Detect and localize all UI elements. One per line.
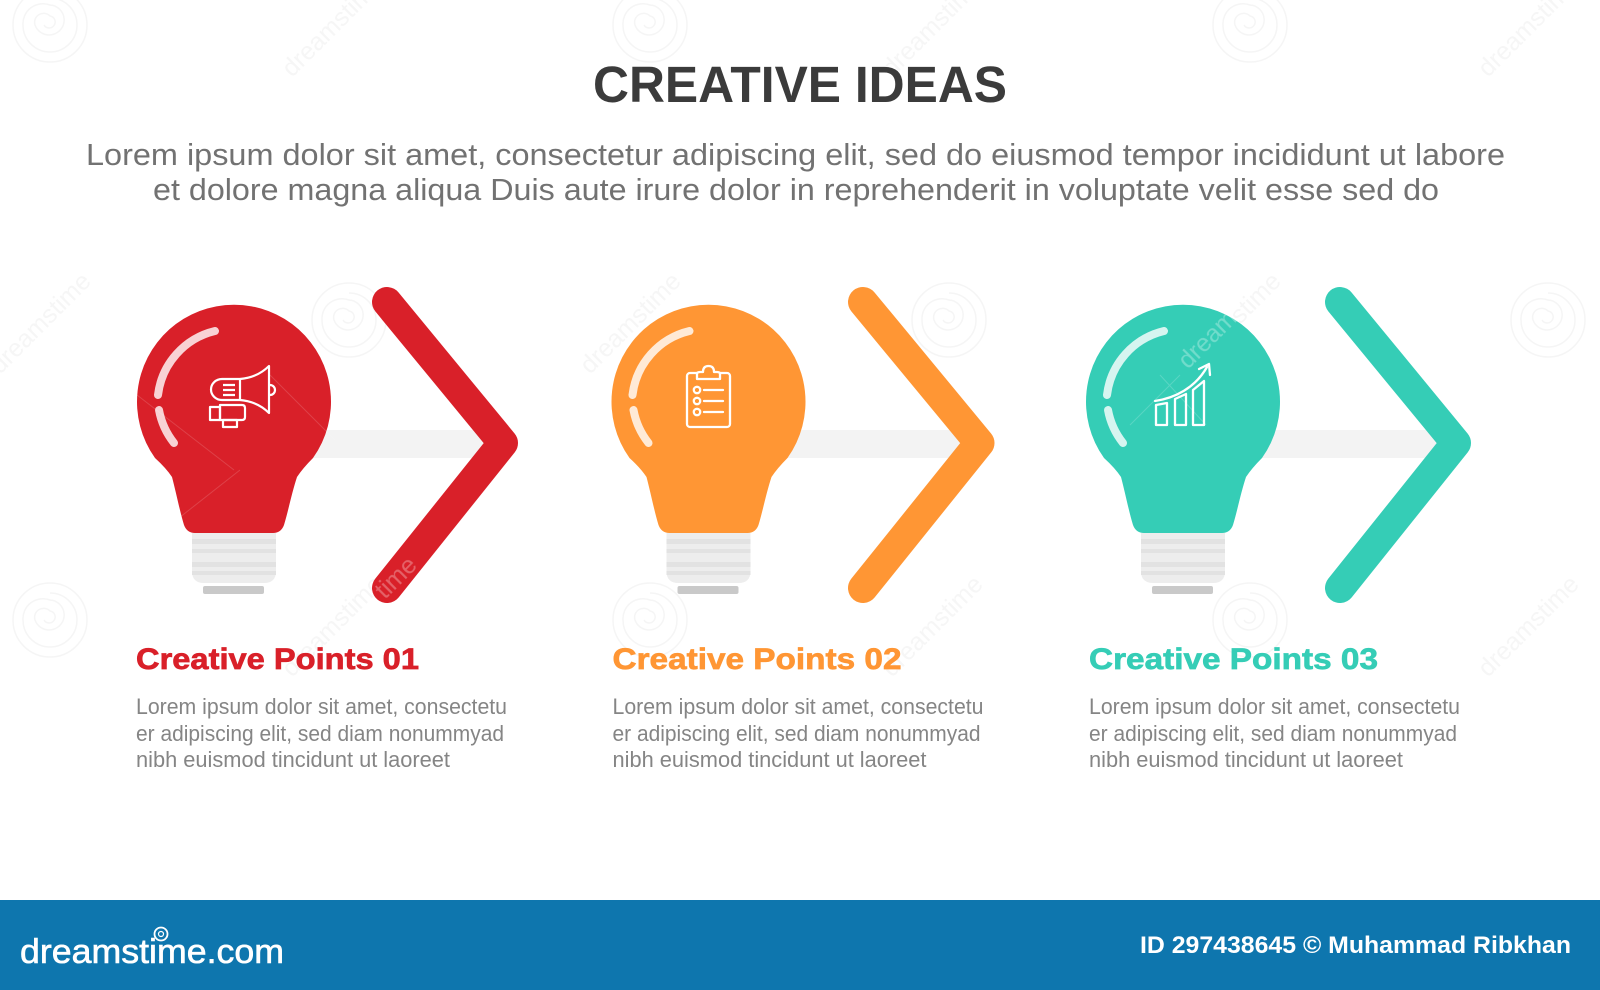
body text 01: er adipiscing elit, sed diam nonummyad bbox=[136, 721, 504, 746]
arrow shaft 03 bbox=[1260, 430, 1438, 458]
footer bar bbox=[0, 900, 1600, 990]
icon: megaphone bbox=[210, 366, 275, 427]
arrow shaft 02 bbox=[785, 430, 962, 458]
panel: creative point 01 bbox=[136, 302, 507, 772]
lightbulb 02 bbox=[611, 305, 805, 594]
arrow chevron 01 bbox=[387, 302, 503, 588]
footer credit: ID 297438645 © Muhammad Ribkhan bbox=[1140, 932, 1571, 959]
panel: creative point 03 bbox=[1086, 302, 1460, 772]
body text 03: Lorem ipsum dolor sit amet, consectetu bbox=[1089, 694, 1460, 719]
watermark background: dreamstime bbox=[276, 570, 389, 682]
subtitle text: et dolore magna aliqua Duis aute irure dolor in reprehenderit in voluptate velit esse sed do bbox=[153, 172, 1439, 207]
body text 02: er adipiscing elit, sed diam nonummyad bbox=[612, 721, 980, 746]
watermark background: dreamstime bbox=[574, 267, 687, 379]
body text 02 bbox=[612, 694, 984, 772]
lightbulb 03 bbox=[1086, 305, 1280, 594]
icon: rising chart bbox=[1155, 364, 1210, 425]
body text 01: nibh euismod tincidunt ut laoreet bbox=[136, 747, 450, 772]
title: CREATIVE IDEAS bbox=[593, 56, 1007, 113]
body text 02: Lorem ipsum dolor sit amet, consectetu bbox=[612, 694, 984, 719]
watermark background bbox=[0, 0, 1585, 682]
body text 01 bbox=[136, 694, 507, 772]
footer logo: dreamstime.com bbox=[20, 933, 284, 971]
watermark overlay bbox=[137, 304, 1242, 604]
arrow chevron 02 bbox=[863, 302, 980, 588]
panel: creative point 02 bbox=[611, 302, 984, 772]
icon: clipboard bbox=[687, 366, 730, 427]
lightbulb 01 bbox=[137, 305, 331, 594]
body text 03 bbox=[1089, 694, 1460, 772]
body text 02: nibh euismod tincidunt ut laoreet bbox=[612, 747, 926, 772]
watermark overlay: dream bbox=[1172, 304, 1242, 374]
watermark background: dreamstime bbox=[876, 570, 989, 682]
heading 03: Creative Points 03 bbox=[1089, 643, 1378, 676]
heading 02: Creative Points 02 bbox=[612, 643, 902, 676]
body text 01: Lorem ipsum dolor sit amet, consectetu bbox=[136, 694, 507, 719]
watermark overlay: time bbox=[369, 551, 423, 604]
body text 03: er adipiscing elit, sed diam nonummyad bbox=[1089, 721, 1457, 746]
watermark background: dreamstime bbox=[1472, 570, 1585, 682]
body text 03: nibh euismod tincidunt ut laoreet bbox=[1089, 747, 1403, 772]
subtitle text: Lorem ipsum dolor sit amet, consectetur adipiscing elit, sed do eiusmod tempor incididunt ut labore bbox=[86, 137, 1505, 172]
subtitle text bbox=[86, 137, 1505, 207]
watermark background: dreamstime bbox=[1174, 267, 1287, 379]
arrow shaft 01 bbox=[310, 430, 486, 458]
heading 01: Creative Points 01 bbox=[136, 643, 419, 676]
arrow chevron 03 bbox=[1340, 302, 1456, 588]
